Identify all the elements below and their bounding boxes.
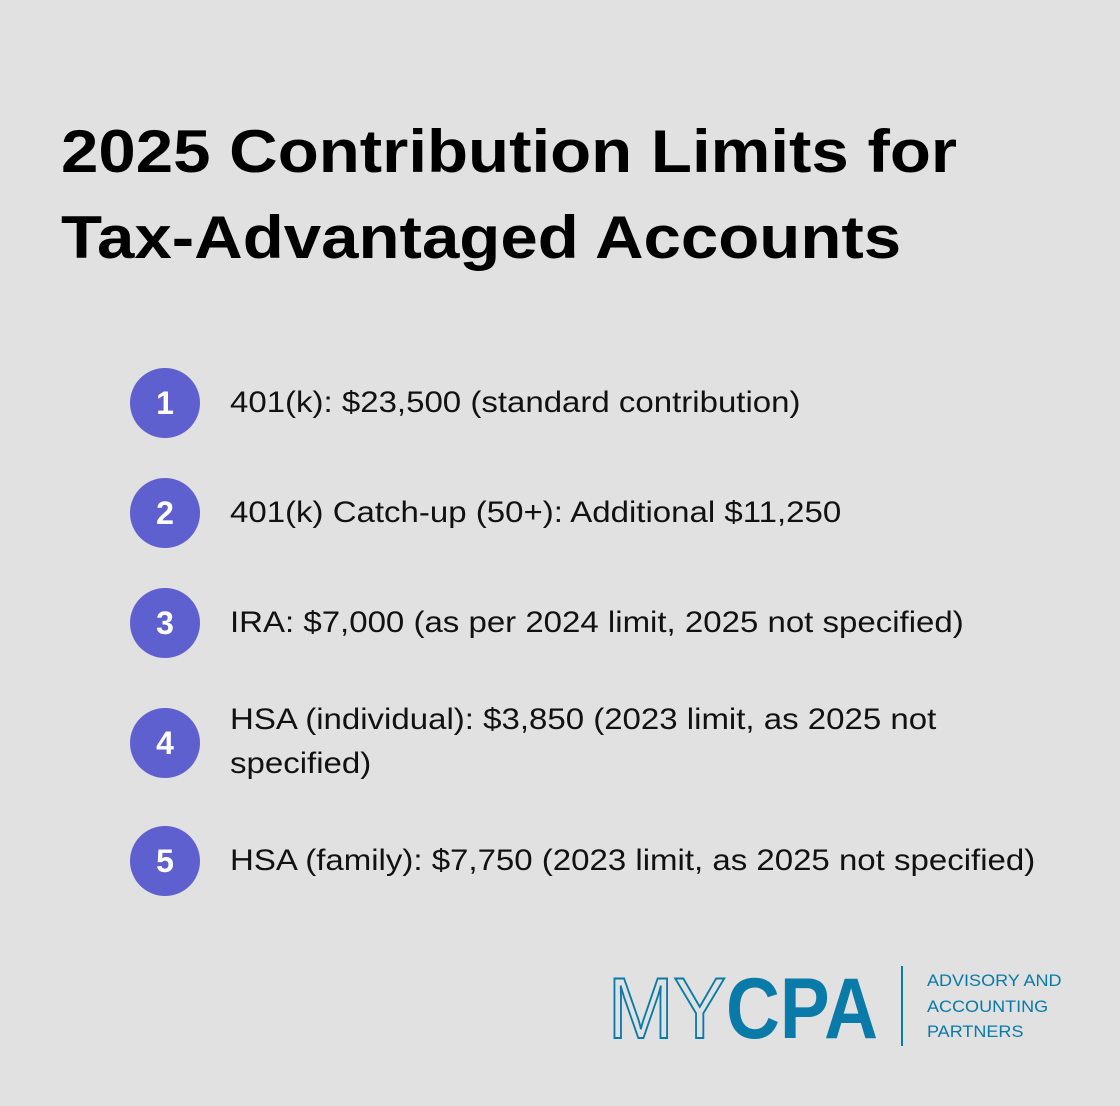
item 3: 3 xyxy=(156,605,174,641)
logo tagline: PARTNERS xyxy=(927,1022,1023,1041)
item 5 xyxy=(130,826,1035,896)
item 3: IRA: $7,000 (as per 2024 limit, 2025 not specified) xyxy=(230,606,964,639)
title: Tax-Advantaged Accounts xyxy=(61,204,901,271)
logo tagline: ACCOUNTING xyxy=(927,996,1048,1016)
item 2 xyxy=(130,478,841,548)
item 4: HSA (individual): $3,850 (2023 limit, as 2025 not xyxy=(230,703,936,736)
logo tagline: ADVISORY AND xyxy=(927,971,1062,990)
title xyxy=(61,118,957,271)
logo wordmark xyxy=(608,961,878,1057)
item 1 xyxy=(130,368,801,438)
item 4: specified) xyxy=(230,747,371,780)
item 4 xyxy=(130,703,936,780)
logo xyxy=(608,966,1062,1048)
item 1: 401(k): $23,500 (standard contribution) xyxy=(230,386,801,419)
title: 2025 Contribution Limits for xyxy=(61,118,957,185)
logo tagline xyxy=(927,971,1062,1041)
item 3 xyxy=(130,588,964,658)
item 4: 4 xyxy=(156,725,174,761)
item 5: HSA (family): $7,750 (2023 limit, as 2025 not specified) xyxy=(230,844,1035,877)
item 1: 1 xyxy=(156,385,174,421)
item 2: 401(k) Catch-up (50+): Additional $11,250 xyxy=(230,496,841,529)
item 5: 5 xyxy=(156,843,174,879)
item 2: 2 xyxy=(156,495,174,531)
